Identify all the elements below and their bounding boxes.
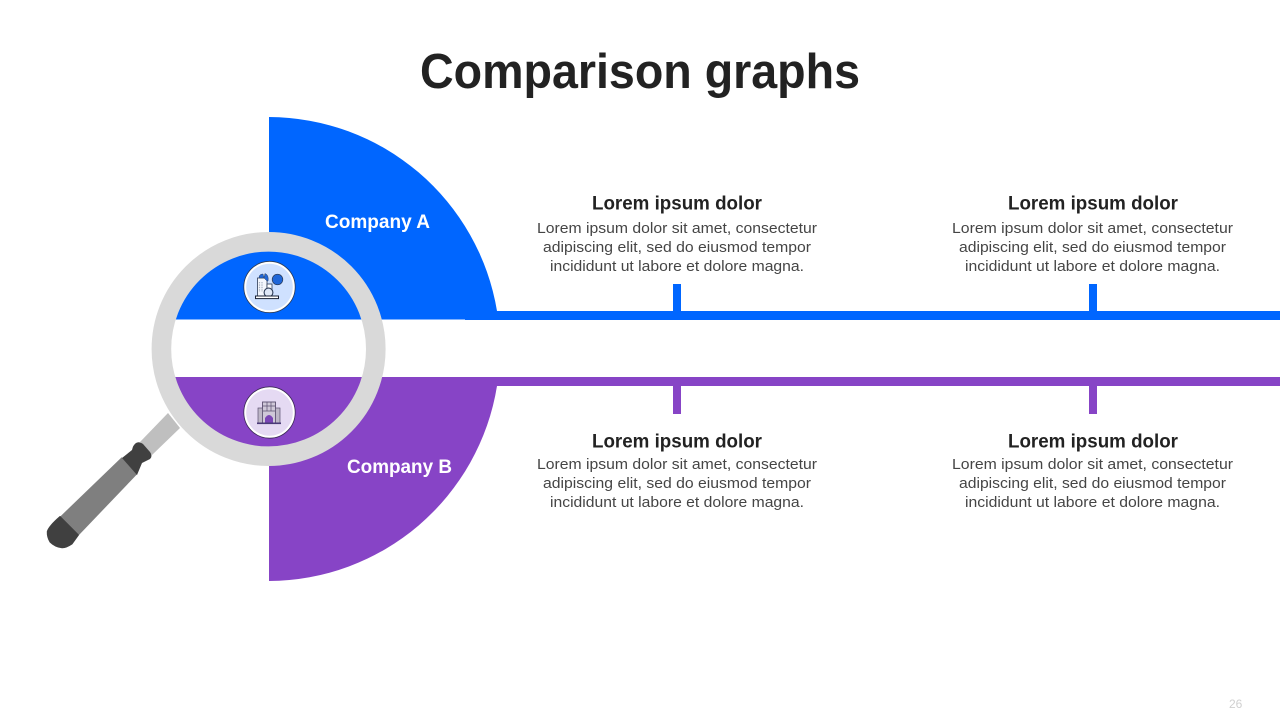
icon: company A factory	[244, 261, 295, 313]
handle collar	[122, 442, 152, 475]
text block: top left: Lorem ipsum dolor sit amet, consectetur	[537, 220, 817, 237]
page number: 26	[1229, 697, 1243, 711]
text block: bottom right: incididunt ut labore et dolore magna.	[965, 494, 1220, 511]
handle grip	[60, 457, 137, 535]
text block: bottom right: Lorem ipsum dolor sit amet, consectetur	[952, 456, 1233, 473]
text block: top left: Lorem ipsum dolor	[592, 194, 763, 214]
icon: magnifying glass	[47, 242, 376, 548]
handle shaft	[140, 413, 180, 455]
text block: top right: incididunt ut labore et dolore magna.	[965, 258, 1220, 275]
panel: company A half disc	[269, 117, 497, 320]
text block: bottom left: incididunt ut labore et dolore magna.	[550, 494, 804, 511]
text block: top left: incididunt ut labore et dolore magna.	[550, 258, 804, 275]
text block: bottom right: adipiscing elit, sed do eiusmod tempor	[959, 475, 1226, 492]
timeline: company A	[465, 284, 1280, 320]
text block: bottom right: Lorem ipsum dolor	[1008, 432, 1179, 452]
label: company A: Company A	[325, 211, 430, 233]
text block: bottom left	[537, 432, 817, 511]
lens ring	[161, 242, 376, 456]
text block: bottom right	[952, 432, 1233, 511]
text block: top right: Lorem ipsum dolor sit amet, consectetur	[952, 220, 1233, 237]
text block: bottom left: Lorem ipsum dolor	[592, 432, 763, 452]
text block: top right	[952, 194, 1233, 275]
title: Comparison graphs	[420, 45, 860, 99]
panel: company B half disc	[269, 377, 497, 581]
text block: bottom left: Lorem ipsum dolor sit amet, consectetur	[537, 456, 817, 473]
timeline: company B	[465, 377, 1280, 414]
text block: top left: adipiscing elit, sed do eiusmod tempor	[543, 239, 811, 256]
handle end cap	[47, 516, 78, 548]
text block: top right: Lorem ipsum dolor	[1008, 194, 1179, 214]
lens: blue segment	[175, 251, 362, 320]
text block: top left	[537, 194, 817, 275]
lens: purple segment	[175, 377, 362, 447]
text block: top right: adipiscing elit, sed do eiusmod tempor	[959, 239, 1226, 256]
icon: company B building	[244, 387, 295, 438]
text block: bottom left: adipiscing elit, sed do eiusmod tempor	[543, 475, 811, 492]
label: company B: Company B	[347, 456, 452, 478]
